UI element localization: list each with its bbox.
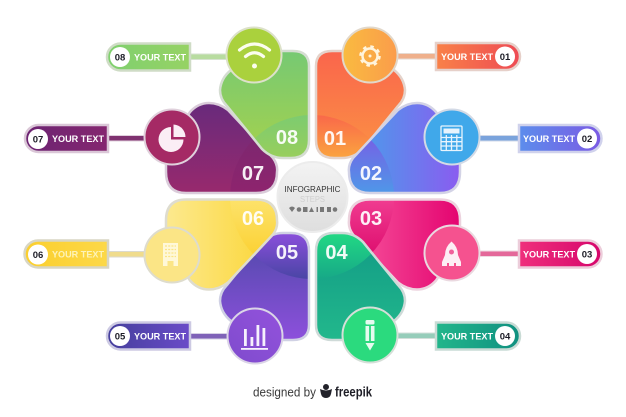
connector 03 <box>478 251 520 256</box>
connector 06 <box>107 252 149 257</box>
label 05: YOUR TEXT <box>134 331 186 342</box>
petal 02 inner arc <box>350 140 394 192</box>
petal 08 inner arc <box>255 115 308 156</box>
label 02 <box>519 125 602 152</box>
label 05 <box>107 322 190 350</box>
panel: step 03 <box>348 198 603 291</box>
label 08: 08 <box>115 52 125 64</box>
icon: gear <box>360 46 380 66</box>
circle 06 <box>144 228 200 282</box>
center circle <box>278 162 348 232</box>
circle 01 <box>342 28 398 82</box>
panel: step 08 <box>106 26 310 160</box>
label 03: 03 <box>582 250 592 260</box>
panel: step 07 <box>24 102 278 194</box>
icon: calculator <box>441 126 462 150</box>
number 03: 03 <box>360 208 382 230</box>
panel: step 01 <box>314 26 522 160</box>
petal 07 <box>166 103 277 193</box>
petal 01 <box>316 51 405 158</box>
label 07 <box>25 125 108 152</box>
petal 04 inner arc <box>317 234 371 274</box>
label 01 <box>436 43 520 70</box>
petal 07 inner arc <box>230 184 272 192</box>
label 08 <box>107 44 190 70</box>
panel: step 05 <box>106 232 310 364</box>
footer credit: designed by <box>253 386 317 400</box>
small icon row <box>289 206 337 212</box>
label 02: YOUR TEXT <box>523 134 575 145</box>
icon: freepik logo <box>320 384 332 398</box>
number 07: 07 <box>242 163 264 185</box>
connector 07 <box>107 136 149 141</box>
number 02: 02 <box>360 163 382 185</box>
circle 02 <box>424 110 480 164</box>
petal 03 inner arc <box>350 201 391 252</box>
circle 04 <box>342 308 398 362</box>
icon: rocket <box>442 242 461 266</box>
label 07: YOUR TEXT <box>52 134 104 145</box>
label 08: YOUR TEXT <box>134 52 186 63</box>
center subheading: STEPS <box>300 195 325 204</box>
label 02: 02 <box>582 134 592 145</box>
circle 08 <box>226 28 282 82</box>
number 04: 04 <box>325 242 348 264</box>
footer credit <box>253 384 372 400</box>
panel: step 04 <box>314 232 522 364</box>
label 03 <box>519 240 602 268</box>
number 05: 05 <box>276 242 298 264</box>
connector 02 <box>478 136 520 141</box>
number 01: 01 <box>324 128 346 150</box>
circle 07 <box>144 110 200 164</box>
icon: pencil <box>366 320 374 350</box>
panel: step 06 <box>23 198 278 291</box>
number 08: 08 <box>276 127 298 149</box>
label 06 <box>24 240 108 268</box>
petal 01 inner arc <box>317 115 360 157</box>
petal 02 <box>349 103 460 193</box>
panel: step 02 <box>348 102 603 194</box>
icon: building <box>163 243 178 266</box>
icon: bar chart <box>241 325 268 350</box>
petal 08 <box>220 51 309 158</box>
center heading: INFOGRAPHIC <box>284 185 341 194</box>
freepik wordmark: freepik <box>335 384 372 400</box>
petal 06 inner arc <box>230 200 276 254</box>
circle 05 <box>228 308 282 364</box>
label 06: YOUR TEXT <box>52 249 104 260</box>
label 06: 06 <box>33 250 43 261</box>
label 03: YOUR TEXT <box>523 249 575 260</box>
petal 05 inner arc <box>255 234 308 279</box>
petal 04 <box>316 233 405 340</box>
icon: wifi <box>240 44 270 68</box>
petal 06 <box>166 200 277 290</box>
label 01: YOUR TEXT <box>441 52 493 63</box>
connector 05 <box>189 334 231 339</box>
connector 08 <box>189 54 231 60</box>
label 01: 01 <box>500 52 511 63</box>
circle 03 <box>424 226 480 280</box>
label 04 <box>436 322 520 350</box>
icon: pie chart <box>158 124 186 152</box>
petal 05 <box>220 233 309 340</box>
label 04: YOUR TEXT <box>441 331 493 342</box>
label 07: 07 <box>33 134 43 146</box>
connector 04 <box>396 333 436 338</box>
label 04: 04 <box>500 332 511 342</box>
label 05: 05 <box>115 332 126 342</box>
number 06: 06 <box>242 208 264 230</box>
petal 03 <box>349 200 460 290</box>
connector 01 <box>396 54 436 59</box>
